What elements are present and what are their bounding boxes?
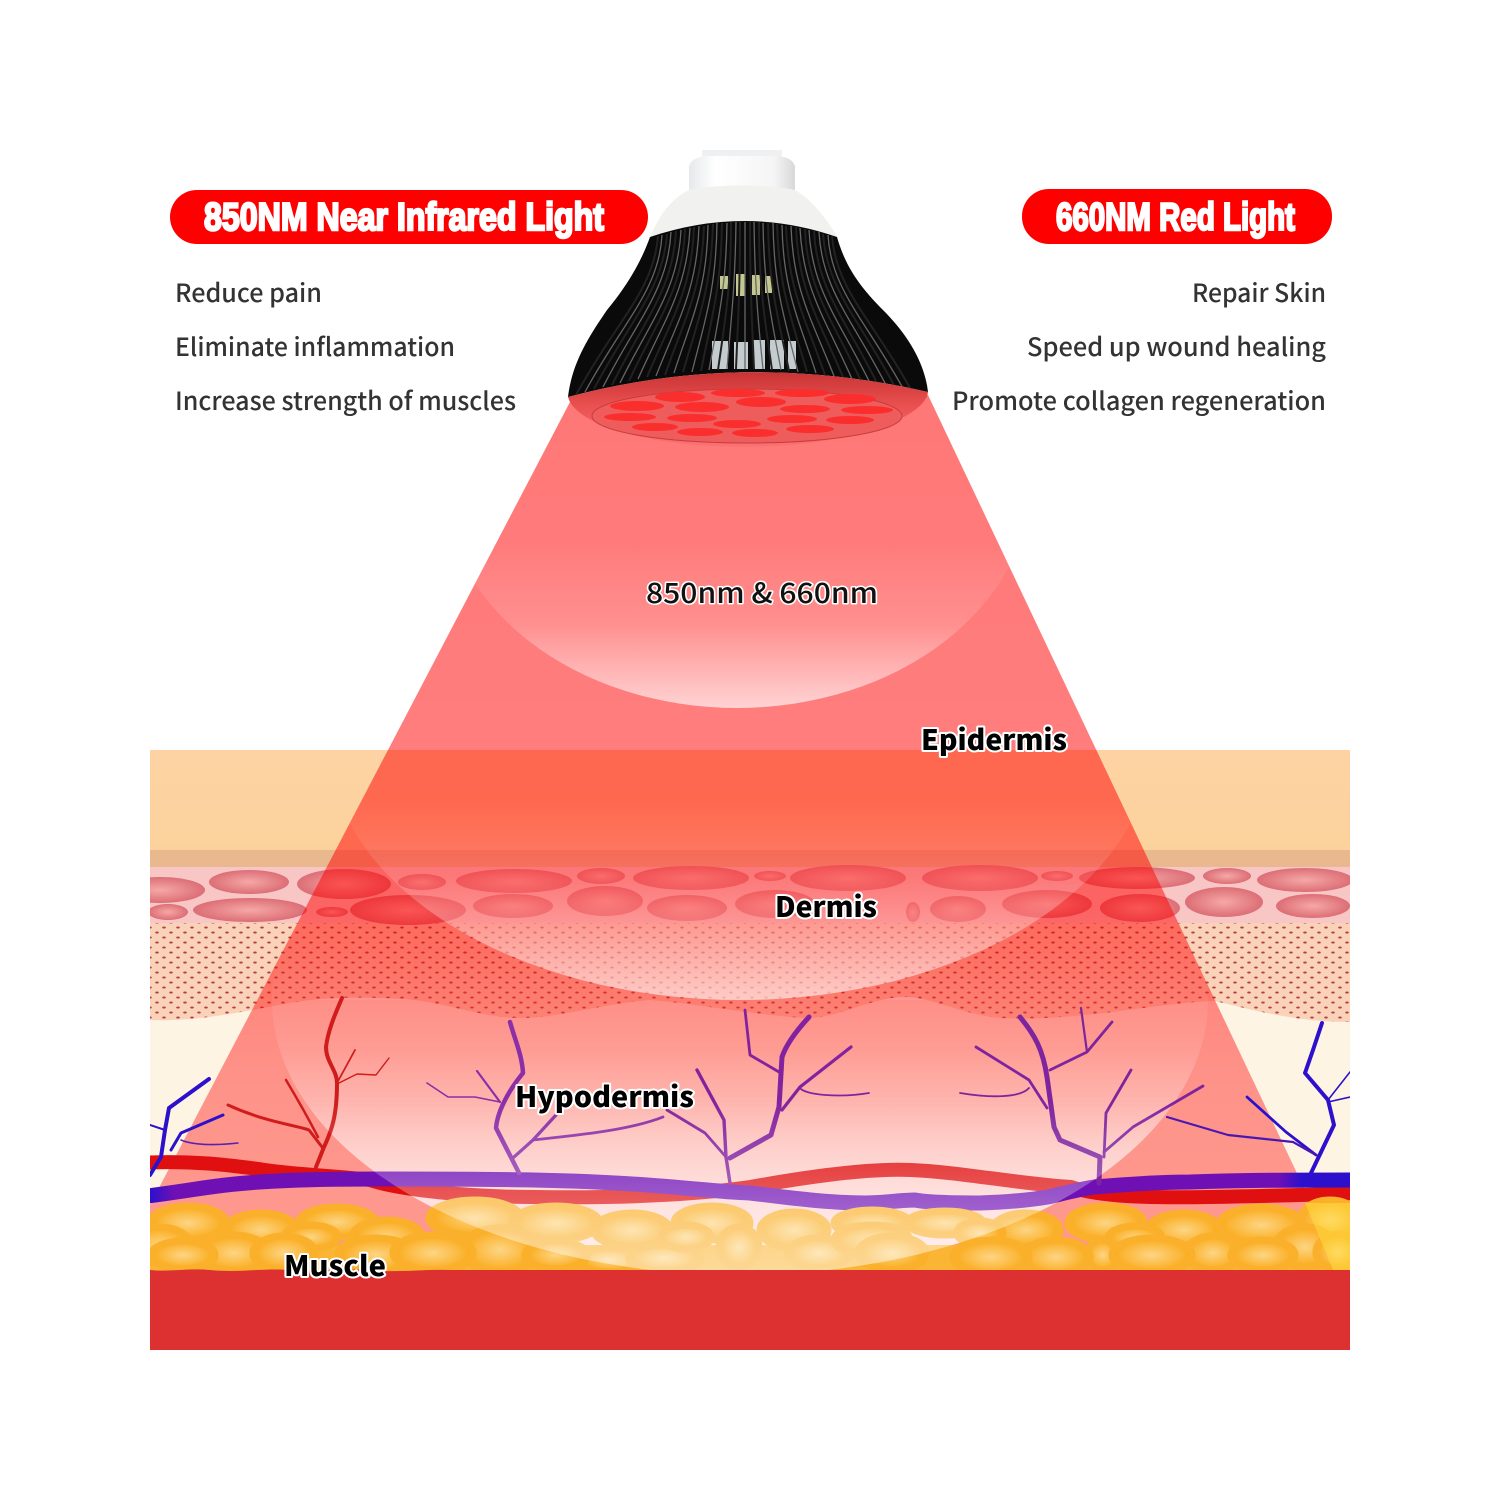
left benefits list — [175, 274, 516, 418]
right blue capillary tree — [1167, 1023, 1350, 1173]
badge: 660NM red light — [1022, 189, 1332, 244]
light intensity glows — [272, 576, 1208, 1245]
heat sink fins — [585, 222, 905, 392]
epidermis layer — [150, 750, 1350, 850]
left benefits list: Increase strength of muscles — [175, 382, 516, 418]
blood vessels — [140, 998, 1360, 1203]
left blue capillary tree — [150, 1079, 238, 1175]
badge: 850NM near infrared light — [170, 190, 648, 244]
hypodermis background — [150, 1000, 1350, 1245]
purple capillary tree 2 — [427, 1022, 663, 1173]
lens inner ring — [592, 389, 902, 443]
badge: 850NM near infrared light: 850NM Near Infrared Light — [204, 196, 604, 239]
glow: middle arc — [352, 826, 1128, 1000]
lower glow over vessels and fat — [272, 725, 1208, 1275]
label: hypodermis: Hypodermis — [515, 1076, 694, 1116]
artery — [140, 1162, 1360, 1197]
vein — [140, 1179, 1360, 1203]
heat sink body — [568, 221, 928, 397]
right benefits list: Repair Skin — [1192, 274, 1326, 310]
LED array — [604, 389, 893, 437]
label: dermis: Dermis — [775, 886, 877, 926]
badge: 660NM red light: 660NM Red Light — [1056, 196, 1295, 239]
dermis cell band — [150, 867, 1350, 927]
silver reflection through fins — [712, 340, 796, 369]
glow: lower arc — [272, 982, 1208, 1245]
purple capillary tree 4 — [960, 1008, 1203, 1183]
purple capillary tree 3 — [667, 1010, 869, 1183]
beam tint on fat at right edge — [1305, 1203, 1350, 1272]
subcutaneous fat cells — [130, 1200, 1360, 1274]
dermis upper band — [150, 850, 1350, 868]
heat sink fin shadows — [576, 222, 914, 395]
bulb shoulder — [650, 186, 838, 238]
label: epidermis: Epidermis — [921, 719, 1067, 759]
left benefits list: Reduce pain — [175, 274, 322, 310]
light bulb — [568, 150, 928, 447]
light beam — [150, 395, 1350, 1300]
bulb collar — [689, 156, 795, 197]
red lens dish — [568, 372, 928, 447]
red capillary tree — [228, 998, 389, 1167]
muscle layer — [150, 1269, 1350, 1350]
label: wavelengths: 850nm & 660nm — [646, 572, 878, 612]
skin cross-section layers — [150, 750, 1350, 1245]
label: muscle: Muscle — [284, 1245, 386, 1285]
dermis dotted tissue — [150, 923, 1350, 1022]
right benefits list: Speed up wound healing — [1027, 328, 1327, 364]
bulb cap tab — [702, 150, 782, 159]
glow: upper arc — [476, 576, 1003, 708]
left benefits list: Eliminate inflammation — [175, 328, 455, 364]
right benefits list: Promote collagen regeneration — [952, 382, 1326, 418]
right benefits list — [952, 274, 1327, 418]
inner glow through fins — [720, 274, 772, 296]
dermis cells — [115, 865, 1353, 925]
